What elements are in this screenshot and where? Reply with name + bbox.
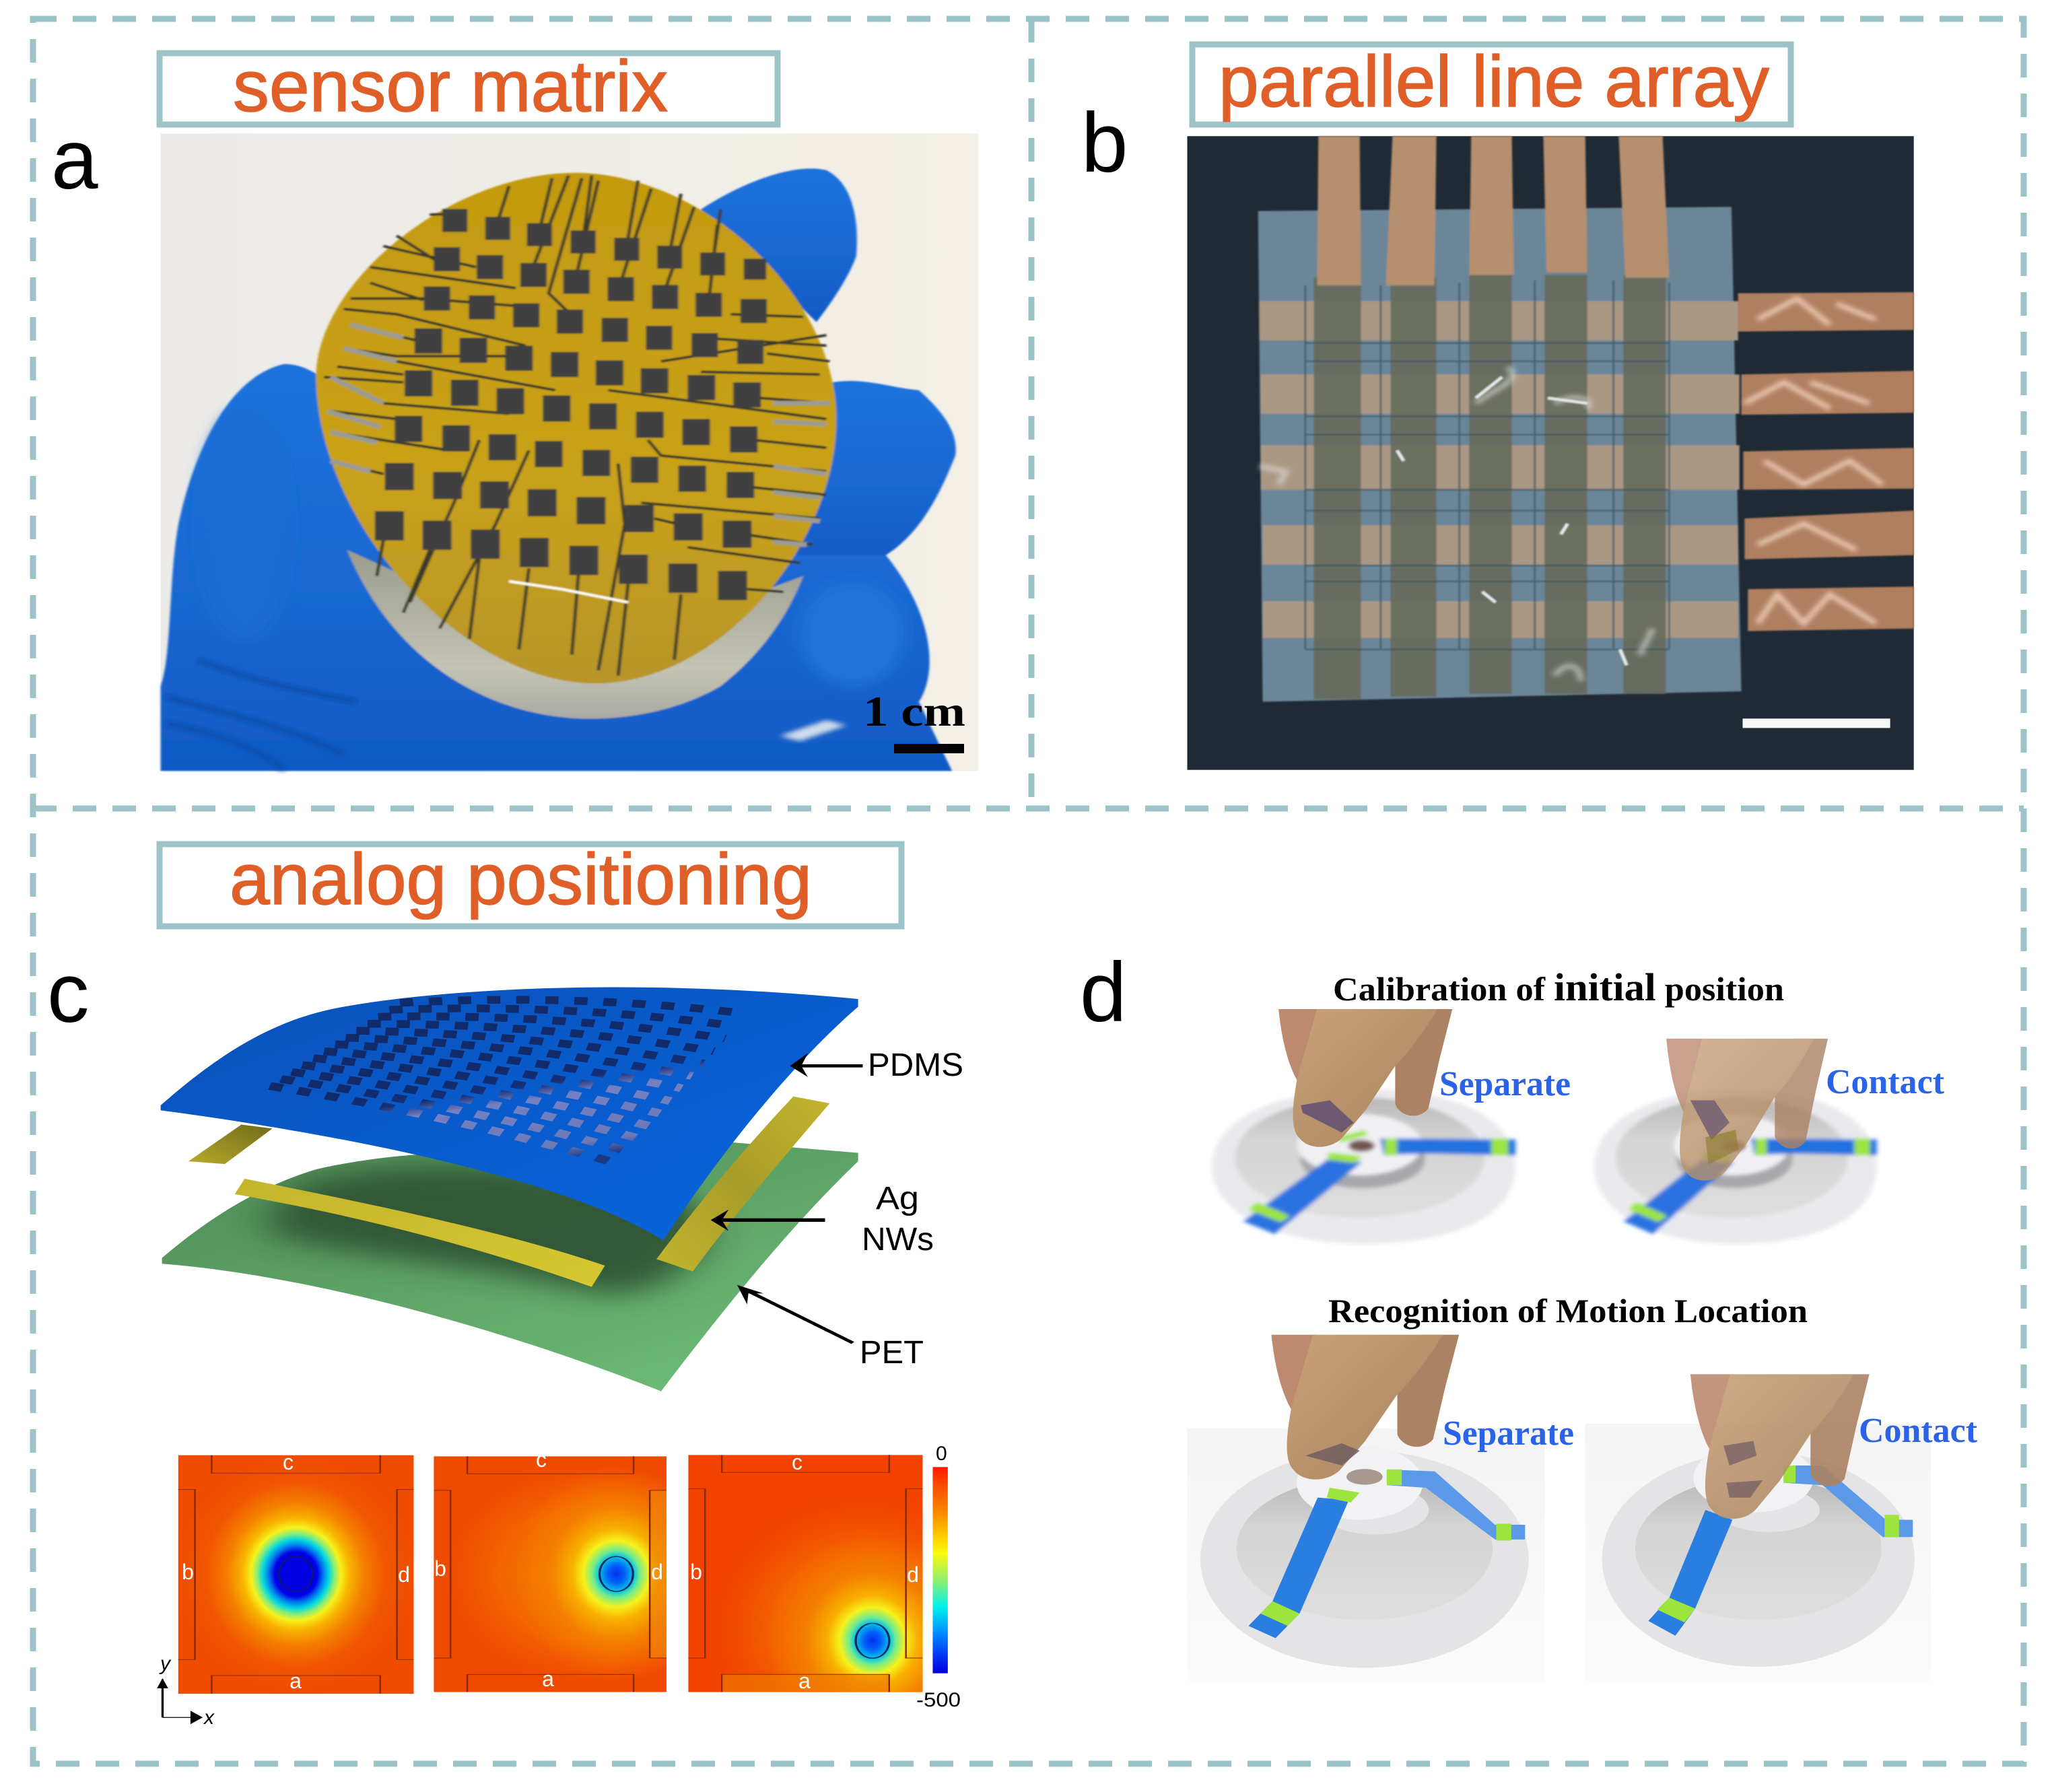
vertical nanowire stripes — [1313, 275, 1666, 699]
heatmap electrode letters: c — [536, 1447, 547, 1472]
colour bar labels: -500 — [916, 1689, 961, 1711]
label PDMS: PDMS — [868, 1047, 963, 1083]
label contact bottom: Contact — [1859, 1412, 1978, 1450]
heatmap electrode letters: c — [283, 1450, 294, 1474]
heatmap 3 — [688, 1455, 923, 1692]
heatmap 2 — [434, 1456, 666, 1692]
heatmap electrode letters: a — [289, 1669, 302, 1693]
heatmap electrode letters: b — [182, 1560, 194, 1584]
device: bottom left separate — [1187, 1428, 1545, 1681]
top copper leads — [1317, 136, 1669, 285]
heatmap electrode letters: b — [434, 1556, 446, 1581]
photo: transparent crossbar array on dark surface — [1188, 136, 1914, 770]
pyramid microstructure array — [270, 1000, 747, 1163]
right copper leads — [1738, 292, 1914, 631]
axis labels — [159, 1653, 215, 1729]
label separate bottom: Separate — [1443, 1414, 1574, 1453]
front silver nanowire strip — [235, 1179, 605, 1287]
heatmap electrode letters: c — [792, 1450, 802, 1474]
glass base of disc — [347, 550, 803, 719]
heatmap electrode letters: d — [907, 1562, 919, 1587]
horizontal copper under film — [1260, 301, 1740, 638]
label contact top: Contact — [1826, 1063, 1945, 1101]
label separate top: Separate — [1439, 1065, 1571, 1103]
heading: recognition: Recognition of Motion Location — [1328, 1292, 1808, 1330]
scale bar b — [1742, 718, 1890, 728]
blue PDMS layer — [161, 988, 858, 1241]
panel a: sensor matrix — [51, 45, 978, 771]
label Ag NWs: NWs — [862, 1222, 934, 1257]
xy axes — [162, 1680, 201, 1717]
arrow to PDMS — [790, 1053, 863, 1077]
title box: parallel line array: parallel line array — [1219, 40, 1769, 122]
scale bar a — [894, 744, 964, 753]
title box: analog positioning: analog positioning — [230, 838, 812, 920]
label PET: PET — [860, 1335, 924, 1371]
label Ag NWs — [862, 1181, 934, 1257]
green PET layer — [162, 1142, 858, 1391]
panel letter c: c — [47, 946, 89, 1040]
photo: sensor disc held in blue glove — [161, 133, 978, 771]
panel b: parallel line array — [1081, 40, 1914, 770]
sensor squares — [375, 209, 767, 600]
heatmap row — [157, 1446, 960, 1725]
layered device diagram — [161, 988, 863, 1391]
heatmap electrode letters: a — [798, 1669, 811, 1693]
device: top left separate — [1212, 1089, 1515, 1244]
colour bar labels — [916, 1443, 961, 1711]
panel letter a: a — [51, 113, 98, 207]
panel letter d: d — [1080, 946, 1127, 1039]
device: bottom right contact — [1585, 1424, 1931, 1681]
film sheet — [1258, 207, 1742, 702]
axis labels: y — [159, 1653, 172, 1675]
hand: bottom left — [1271, 1335, 1459, 1480]
colour bar — [932, 1467, 948, 1674]
hand: top left — [1278, 1009, 1452, 1147]
heatmap electrode letters: a — [542, 1667, 554, 1691]
heatmap electrode letters: d — [651, 1560, 663, 1584]
colour bar labels: 0 — [936, 1443, 947, 1465]
heatmap electrode letters: b — [690, 1560, 702, 1584]
panel c: analog positioning — [50, 841, 962, 1725]
hand: top right — [1666, 1039, 1828, 1181]
glove fingers — [161, 168, 956, 771]
grid outline marks — [1305, 280, 1669, 650]
label Ag NWs: Ag — [876, 1181, 919, 1216]
device: top right contact — [1594, 1089, 1877, 1244]
scale label 1 cm: 1 cm — [863, 687, 965, 735]
hand: bottom right — [1690, 1374, 1870, 1519]
panel d: calibration and motion recognition — [1080, 946, 1978, 1681]
right silver nanowire strip — [656, 1097, 829, 1272]
axis labels: x — [203, 1707, 215, 1729]
arrow to PET — [737, 1285, 853, 1343]
gold disc — [316, 173, 836, 683]
small rear silver nanowire strip — [189, 1125, 273, 1164]
heatmap electrode letters: d — [398, 1562, 410, 1587]
arrow to Ag NWs — [711, 1210, 825, 1231]
panel letter b: b — [1081, 96, 1128, 190]
heatmap 1 — [178, 1455, 413, 1694]
heatmap electrode letters — [182, 1447, 919, 1693]
traces on the disc — [324, 176, 829, 676]
heading: calibration: Calibration of initial position — [1333, 965, 1784, 1009]
title box: sensor matrix: sensor matrix — [233, 45, 668, 127]
